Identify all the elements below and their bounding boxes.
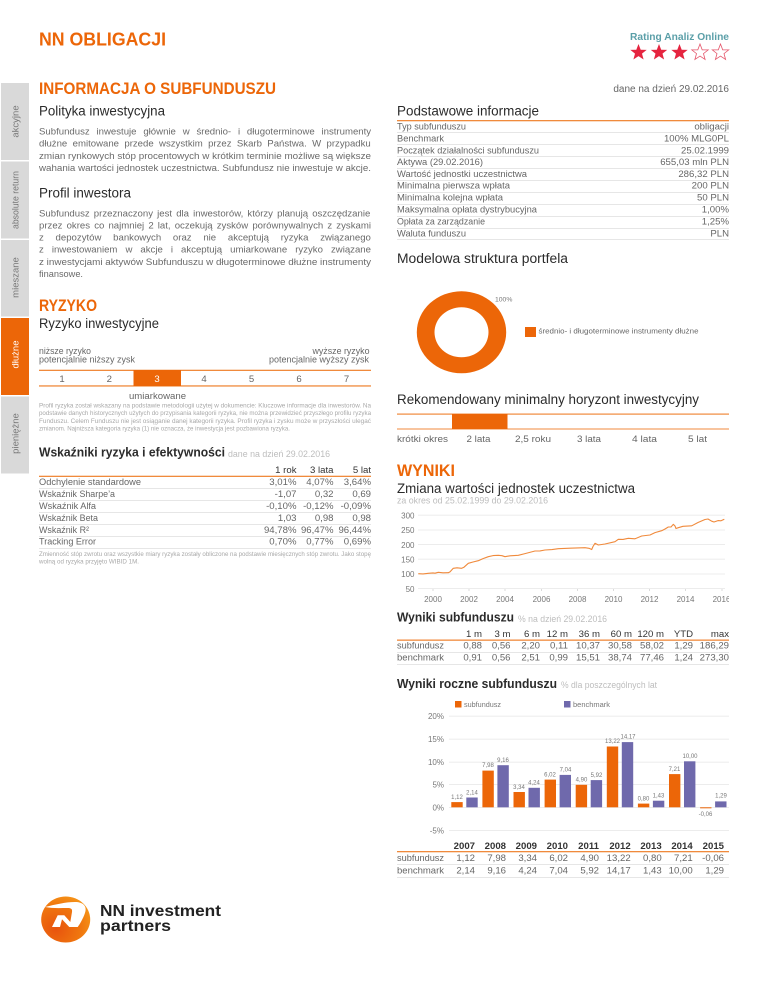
annual results table: benchmark xyxy=(397,866,444,877)
key facts table: 1,25% xyxy=(702,216,729,227)
results table: 10,37 xyxy=(576,640,600,652)
line chart: 2012 xyxy=(641,595,659,604)
key facts table: Benchmark xyxy=(397,134,444,144)
scale end labels: potencjalnie wyższy zysk xyxy=(269,354,369,365)
results table: 6 m xyxy=(524,629,540,640)
bar chart: 10% xyxy=(428,758,444,767)
line chart: 2004 xyxy=(496,595,514,604)
results table: 186,29 xyxy=(700,640,729,652)
horizon labels: 2,5 roku xyxy=(515,434,551,445)
risk note: zmianom. Najniższa kategoria ryzyka (1) nie oznacza, że inwestycja jest pozbawiona ryzyka. xyxy=(39,425,290,432)
results table: 0,91 xyxy=(463,652,482,663)
annual results table: 2009 xyxy=(516,841,537,852)
heading: Profil inwestora xyxy=(39,186,131,200)
results table: 36 m xyxy=(579,629,600,640)
logo: NN investment partners xyxy=(41,896,222,942)
results table: max xyxy=(711,629,729,640)
bar chart: 3,34 xyxy=(513,785,525,791)
rating: Analiz Online xyxy=(630,31,729,60)
risk scale 1 to 7: 6 xyxy=(296,374,302,385)
horizon scale xyxy=(397,414,729,430)
bar chart: 13,22 xyxy=(605,739,621,745)
annual results table: 7,21 xyxy=(674,853,693,864)
risk scale 1 to 7 xyxy=(39,370,371,387)
icon: three filled and two empty stars xyxy=(630,44,729,60)
key facts table: Minimalna pierwsza wpłata xyxy=(397,181,511,192)
text block xyxy=(39,208,371,280)
indicators table: -0,12% xyxy=(303,501,334,512)
side navigation tabs: dłużne xyxy=(10,340,22,368)
annual results table: 9,16 xyxy=(487,866,506,877)
results table: 0,11 xyxy=(550,640,568,652)
annual results table: 7,04 xyxy=(549,866,569,877)
results table: 0,56 xyxy=(492,652,510,663)
text block xyxy=(38,126,371,174)
heading: Modelowa struktura portfela xyxy=(397,251,568,266)
line chart xyxy=(401,512,731,604)
results table: YTD xyxy=(674,629,693,640)
key facts table: Wartość jednostki uczestnictwa xyxy=(397,169,528,180)
risk scale 1 to 7: 1 xyxy=(59,374,65,385)
logo wordmark xyxy=(100,903,222,935)
annual results table: 0,80 xyxy=(643,853,662,864)
indicators table: Wskaźnik Sharpe’a xyxy=(39,489,116,500)
side navigation tabs xyxy=(1,83,29,474)
line chart: 2006 xyxy=(533,595,551,604)
annual results table: 10,00 xyxy=(669,866,693,877)
annual results table: 13,22 xyxy=(607,853,631,864)
key facts table: Minimalna kolejna wpłata xyxy=(397,193,504,204)
indicators table: 0,98 xyxy=(352,513,371,524)
panel: wyniki roczne subfunduszu xyxy=(397,676,729,878)
period note: % dla poszczególnych lat xyxy=(561,680,657,690)
text block: wahania wartości jednostek uczestnictwa. Subfundusz nie inwestuje w akcje. xyxy=(38,163,371,174)
panel: profil inwestora xyxy=(39,186,371,280)
risk label: umiarkowane xyxy=(129,391,186,402)
bar chart: 14,17 xyxy=(620,734,636,740)
heading: Zmiana wartości jednostek uczestnictwa xyxy=(397,481,635,496)
annual results table: 2,14 xyxy=(456,866,476,877)
scale end labels: niższe ryzyko xyxy=(39,346,91,357)
key facts table: 286,32 PLN xyxy=(678,169,729,180)
panel: rekomendowany minimalny horyzont inwestycyjny xyxy=(397,392,729,445)
heading: Wskaźniki ryzyka i efektywności xyxy=(39,445,225,460)
key facts table: 200 PLN xyxy=(692,181,729,192)
indicators table: 0,70% xyxy=(269,536,297,548)
chart legend xyxy=(455,701,611,709)
panel: zmiana wartości jednostek uczestnictwa xyxy=(397,481,731,604)
horizon labels: krótki okres xyxy=(397,434,448,445)
risk note: podstawie danych historycznych użytych do przypisania kategorii ryzyka, nie można przewidzieć przyszłego profilu ryzyka xyxy=(39,410,371,417)
indicators table xyxy=(39,465,371,549)
indicators table: 4,07% xyxy=(306,477,334,488)
annual results table: 5,92 xyxy=(580,866,599,877)
scale end labels xyxy=(39,346,370,365)
line chart: 2000 xyxy=(424,595,442,604)
annual results table: 3,34 xyxy=(518,853,538,864)
annual results table: 6,02 xyxy=(549,853,568,864)
donut chart: 100% xyxy=(495,297,512,304)
key facts table: 25.02.1999 xyxy=(681,146,729,156)
text block: Subfundusz inwestuje głównie w średnio- i długoterminowe instrumenty xyxy=(39,126,371,137)
indicators table: 1 rok xyxy=(275,465,297,476)
results table: 2,51 xyxy=(521,652,540,663)
key facts table: Typ subfunduszu xyxy=(397,122,466,132)
indicators table: Odchylenie standardowe xyxy=(39,477,141,488)
legend: średnio- i długoterminowe instrumenty dłużne xyxy=(538,326,698,336)
bar chart: 7,98 xyxy=(482,763,494,769)
risk scale 1 to 7: 5 xyxy=(249,374,254,385)
text block: z inwestowaniem w akcje i akceptują umiarkowane ryzyko związane xyxy=(39,245,371,256)
key facts table: Początek działalności subfunduszu xyxy=(397,146,539,156)
indicators table: 0,69 xyxy=(352,489,371,500)
indicators table: Wskaźnik Beta xyxy=(39,513,99,524)
risk scale 1 to 7: 4 xyxy=(201,374,207,385)
risk scale 1 to 7: 7 xyxy=(344,374,349,385)
indicators table: 5 lat xyxy=(353,465,371,476)
text block: zmian rynkowych stóp procentowych w krótkim terminie możliwe są większe xyxy=(39,151,371,162)
key facts table: 100% MLG0PL xyxy=(664,134,730,144)
bar chart: -5% xyxy=(430,826,444,836)
text block: finansowe. xyxy=(39,269,83,280)
text block: Subfundusz przeznaczony jest dla inwestorów, którzy planują oszczędzanie xyxy=(39,208,370,219)
indicators table: -0,10% xyxy=(266,501,297,512)
bar chart: 1,29 xyxy=(715,794,727,800)
bar chart: 6,02 xyxy=(544,772,556,778)
annual results table: subfundusz xyxy=(397,853,444,864)
line chart: 2016 xyxy=(713,595,731,604)
bar chart: 2,14 xyxy=(466,790,478,796)
text block: z depozytów bankowych oraz nie akceptują ryzyka związanego xyxy=(39,232,371,244)
annual results table: 1,43 xyxy=(643,866,662,877)
indicators table: 96,44% xyxy=(338,525,371,536)
results table: 1 m xyxy=(466,629,482,640)
indicators table: 94,78% xyxy=(264,525,297,536)
panel: wyniki subfunduszu xyxy=(397,610,729,665)
bar chart: 7,21 xyxy=(669,767,681,773)
line chart: 150 xyxy=(401,556,415,564)
results table xyxy=(397,629,729,665)
scale end labels: wyższe ryzyko xyxy=(312,346,370,357)
annual results table: 2011 xyxy=(578,841,600,852)
horizon labels: 2 lata xyxy=(466,434,491,445)
indicators table: 1,03 xyxy=(278,513,296,524)
results table: 58,02 xyxy=(640,640,664,652)
heading: Ryzyko inwestycyjne xyxy=(39,316,159,331)
heading: informacja o subfunduszu: INFORMACJA O SUBFUNDUSZU xyxy=(39,80,276,98)
results table: 0,99 xyxy=(549,652,568,663)
donut chart xyxy=(417,291,512,373)
date note: dane na dzień 29.02.2016 xyxy=(613,84,729,95)
panel: wskaźniki ryzyka i efektywności xyxy=(38,445,371,566)
bar chart: 15% xyxy=(428,735,444,744)
line chart: 2010 xyxy=(605,595,623,604)
period note: za okres od 25.02.1999 do 29.02.2016 xyxy=(397,496,548,506)
logo wordmark: partners xyxy=(100,918,171,935)
key facts table: Waluta funduszu xyxy=(397,228,466,239)
bar chart: -0,06 xyxy=(699,812,713,818)
panel: polityka inwestycyjna xyxy=(38,104,371,174)
bar chart: 0% xyxy=(432,804,444,812)
line chart: 2008 xyxy=(569,595,587,604)
results table: 38,74 xyxy=(608,652,633,663)
results table: 30,58 xyxy=(608,640,632,652)
line chart: 300 xyxy=(401,512,415,520)
results table: 0,56 xyxy=(492,640,510,652)
results table: 60 m xyxy=(611,629,632,640)
indicators table: 3 lata xyxy=(310,465,334,476)
orange rule xyxy=(397,120,729,121)
line chart: 2002 xyxy=(460,595,478,604)
results table: 1,24 xyxy=(674,652,694,663)
results table: 2,20 xyxy=(521,640,540,652)
side navigation tabs: akcyjne xyxy=(10,105,22,138)
annual results table: -0,06 xyxy=(702,853,724,864)
results table: 0,88 xyxy=(463,640,482,652)
line chart: 250 xyxy=(401,526,415,535)
text block: dłużne emitowane przede wszystkim przez Skarb Państwa. W przypadku xyxy=(39,138,371,150)
results table: 1,29 xyxy=(674,640,693,652)
indicators table: 0,32 xyxy=(315,489,334,500)
annual results table: 7,98 xyxy=(487,853,506,864)
indicators table: 0,98 xyxy=(315,513,334,524)
horizon labels: 5 lat xyxy=(688,434,707,445)
footnote: wolną od ryzyka przyjęto WIBID 1M. xyxy=(38,558,139,566)
risk note xyxy=(39,403,372,432)
bar chart: 9,16 xyxy=(497,758,509,764)
bar chart: 1,43 xyxy=(653,794,665,800)
risk scale 1 to 7: 2 xyxy=(107,374,112,385)
key facts table: Opłata za zarządzanie xyxy=(397,216,485,227)
key facts table: Aktywa (29.02.2016) xyxy=(397,157,483,168)
key facts table: 1,00% xyxy=(702,205,729,216)
line chart: 200 xyxy=(401,541,415,550)
bar chart: 10,00 xyxy=(682,754,698,760)
annual results table: 2012 xyxy=(609,841,631,852)
line chart: 100 xyxy=(401,570,415,579)
scale end labels: potencjalnie niższy zysk xyxy=(39,354,135,365)
title: NN OBLIGACJI xyxy=(39,30,166,50)
annual results table: 2010 xyxy=(547,841,568,852)
indicators table: 3,64% xyxy=(344,477,371,488)
panel: podstawowe informacje xyxy=(397,104,730,240)
heading: Rekomendowany minimalny horyzont inwestycyjny xyxy=(397,392,699,407)
indicators table: Wskaźnik R² xyxy=(39,525,90,536)
chart legend: benchmark xyxy=(573,702,611,709)
key facts table: 50 PLN xyxy=(697,193,729,204)
indicators table: 96,47% xyxy=(301,525,334,536)
risk scale 1 to 7: 3 xyxy=(154,374,160,385)
results table: 15,51 xyxy=(576,652,600,663)
footnote xyxy=(38,551,371,566)
bar chart: 4,90 xyxy=(576,778,588,784)
line chart: 2014 xyxy=(677,595,695,604)
heading: Polityka inwestycyjna xyxy=(39,104,165,118)
annual results table: 2008 xyxy=(485,841,507,852)
rating label: Rating Analiz Online xyxy=(630,31,729,43)
bar chart: 20% xyxy=(428,712,444,721)
panel: ryzyko inwestycyjne xyxy=(39,316,372,432)
heading: Wyniki roczne subfunduszu xyxy=(397,676,557,691)
indicators table: Tracking Error xyxy=(39,536,97,548)
bar chart: 4,24 xyxy=(528,780,540,786)
bar chart xyxy=(428,712,729,836)
bar chart: 5% xyxy=(432,780,444,790)
side navigation tabs: mieszane xyxy=(10,257,22,298)
horizon labels: 4 lata xyxy=(632,434,658,445)
date note: % na dzień 29.02.2016 xyxy=(518,614,607,624)
indicators table: Wskaźnik Alfa xyxy=(39,501,97,512)
results table: 3 m xyxy=(494,629,511,640)
panel: modelowa struktura portfela xyxy=(397,251,698,373)
risk note: Funduszu. Celem Funduszu nie jest osiąganie danej kategorii ryzyka. Profil ryzyka i zysku może w przyszłości ulegać xyxy=(39,418,372,425)
heading: wyniki: WYNIKI xyxy=(397,462,455,480)
heading: Wyniki subfunduszu xyxy=(397,610,514,625)
horizon labels: 3 lata xyxy=(577,434,602,445)
indicators table: -0,09% xyxy=(341,501,371,512)
annual results table: 2015 xyxy=(703,841,725,852)
heading: ryzyko: RYZYKO xyxy=(39,297,97,315)
results table: 12 m xyxy=(547,629,568,640)
bar chart: 1,12 xyxy=(451,795,463,801)
bar chart: 7,04 xyxy=(560,768,572,774)
indicators table: 0,77% xyxy=(306,536,334,548)
line chart: 50 xyxy=(406,585,415,594)
key facts table: PLN xyxy=(710,228,729,239)
annual results table: 1,29 xyxy=(705,866,724,877)
bar chart: 5,92 xyxy=(591,773,603,779)
results table: subfundusz xyxy=(397,640,444,652)
bar chart: 0,80 xyxy=(638,796,650,802)
text block: przez okres co najmniej 2 lat, oczekują zysków porównywalnych z zyskami xyxy=(39,220,371,232)
side navigation tabs: pieniężne xyxy=(10,413,22,454)
indicators table: -1,07 xyxy=(275,489,296,500)
key facts table: obligacji xyxy=(694,122,729,132)
key facts table: Maksymalna opłata dystrybucyjna xyxy=(397,205,538,216)
icon: NN orange emblem xyxy=(41,896,90,942)
side navigation tabs: absolute return xyxy=(10,171,22,229)
annual results table: 1,12 xyxy=(456,853,475,864)
annual results table: 14,17 xyxy=(607,866,631,877)
footnote: Zmienność stóp zwrotu oraz wszystkie miary ryzyka zostały obliczone na podstawie miesięcznych stóp zwrotu. Jako stopę xyxy=(39,551,371,558)
annual results table: 4,24 xyxy=(518,866,538,877)
chart legend: subfundusz xyxy=(464,702,502,709)
indicators table: 3,01% xyxy=(269,477,297,488)
key facts table xyxy=(397,122,730,240)
annual results table: 2007 xyxy=(454,841,475,852)
results table: benchmark xyxy=(397,652,444,663)
annual results table: 2014 xyxy=(671,841,693,852)
key facts table: 655,03 mln PLN xyxy=(660,157,729,168)
risk note: Profil ryzyka został wskazany na podstawie metodologii użytej w dokumencie: Kluczowe informacje dla inwestorów. Na xyxy=(39,403,371,410)
indicators table: 0,69% xyxy=(344,536,371,548)
heading: Podstawowe informacje xyxy=(397,104,539,118)
text block: z inwestycjami aktywów Subfunduszu w długoterminowe dłużne instrumenty xyxy=(39,257,371,268)
annual results table: 4,90 xyxy=(580,853,599,864)
results table: 120 m xyxy=(637,629,664,640)
logo wordmark: NN investment xyxy=(100,903,222,920)
results table: 77,46 xyxy=(640,652,664,663)
annual results table: 2013 xyxy=(640,841,662,852)
horizon labels xyxy=(397,434,707,445)
annual results table xyxy=(397,841,729,878)
date note: dane na dzień 29.02.2016 xyxy=(228,449,330,459)
results table: 273,30 xyxy=(700,652,729,663)
